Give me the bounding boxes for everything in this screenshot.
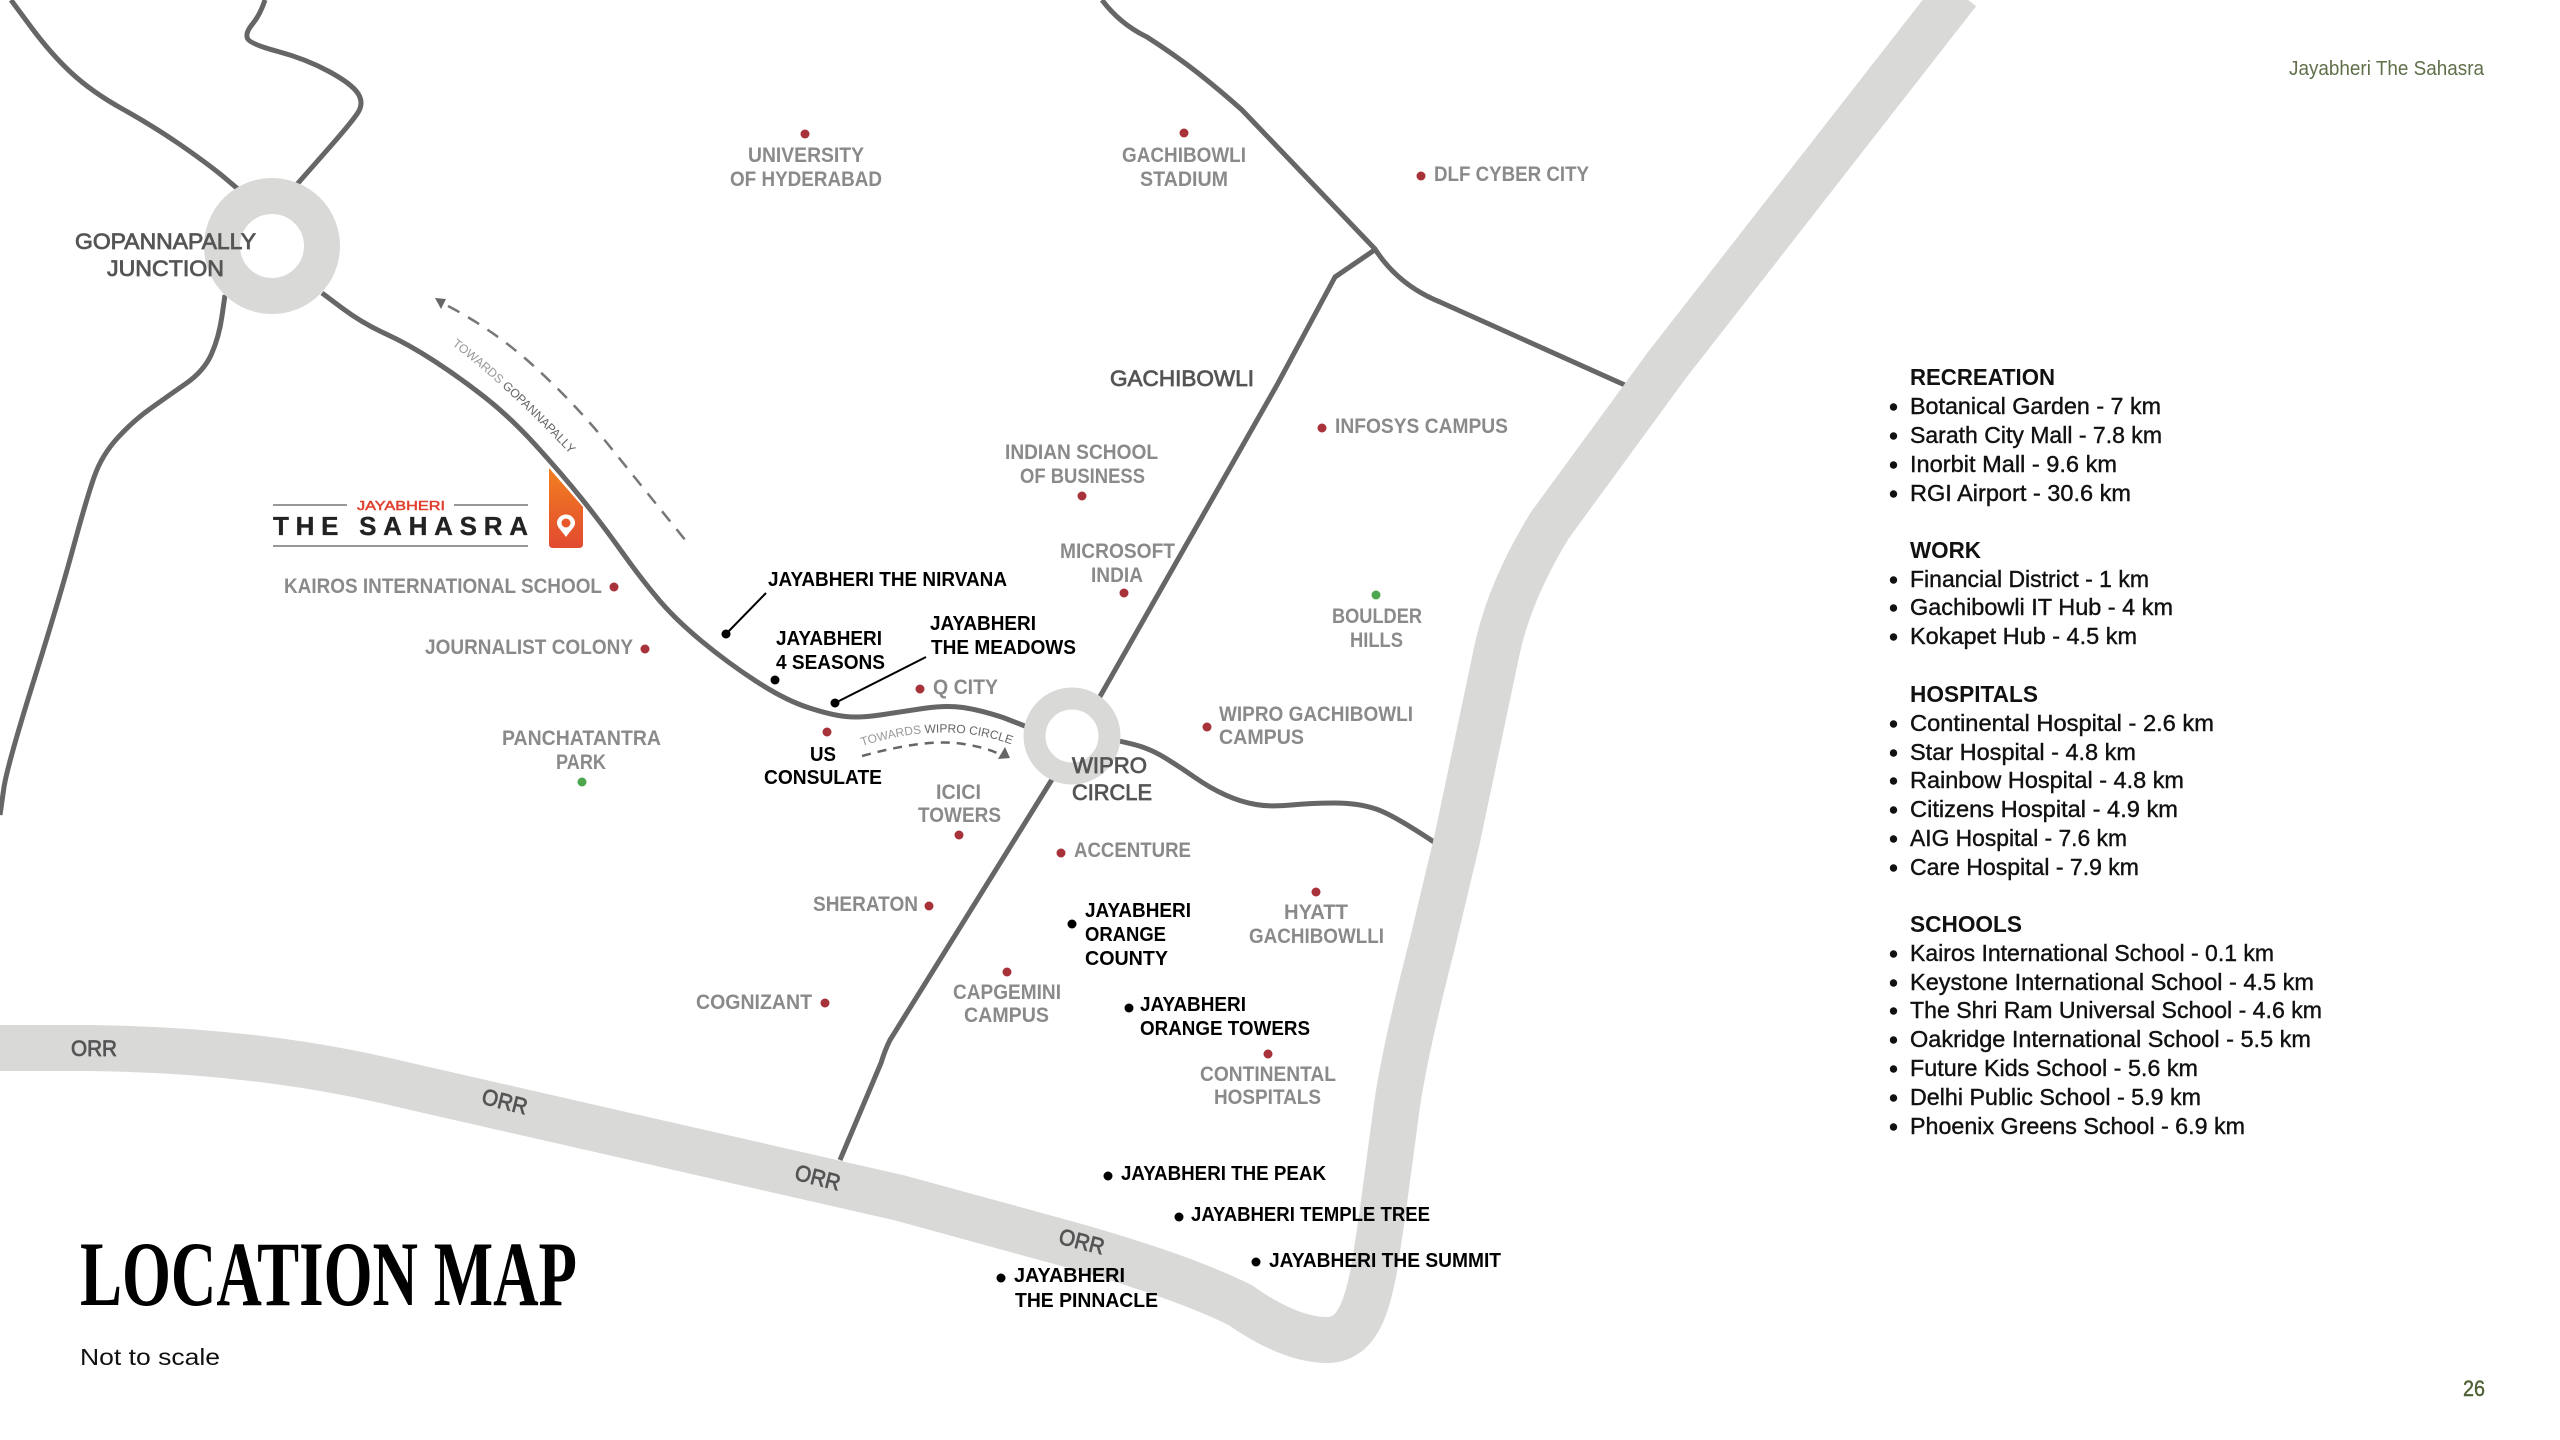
project: Jayabheri Orange County: COUNTY (1085, 947, 1168, 970)
place: ICICI Towers: TOWERS (918, 804, 1001, 827)
project: Jayabheri The Meadows (830, 612, 1076, 708)
list: recreation: Botanical Garden - 7 km (1910, 393, 2161, 419)
project: Jayabheri The Pinnacle: JAYABHERI (1014, 1264, 1125, 1287)
place: Capgemini Campus (953, 968, 1061, 1027)
list: schools (1890, 911, 2322, 1139)
project: Jayabheri Orange Towers: ORANGE TOWERS (1140, 1017, 1310, 1040)
place: Cognizant: COGNIZANT (696, 991, 812, 1014)
place: Panchatantra Park: PARK (556, 751, 606, 774)
place: Gachibowli Stadium (1122, 128, 1246, 191)
label: Wipro Circle: WIPRO (1072, 753, 1147, 778)
list: recreation: RECREATION (1910, 364, 2055, 390)
page number: 26 (2463, 1376, 2485, 1401)
list: hospitals: AIG Hospital - 7.6 km (1910, 825, 2127, 851)
project: Jayabheri Orange County: ORANGE (1085, 923, 1166, 946)
project: Jayabheri The Nirvana: JAYABHERI THE NIRVANA (768, 568, 1007, 591)
list: schools: Kairos International School - 0.1 km (1910, 940, 2274, 966)
road label: ORR 2: ORR (479, 1084, 530, 1119)
project: Jayabheri Orange County (1068, 899, 1191, 970)
place: Capgemini Campus: CAMPUS (964, 1004, 1049, 1027)
list: schools: The Shri Ram Universal School - 4.6 km (1910, 997, 2322, 1023)
road: Wipro Circle to ORR east (1115, 740, 1440, 846)
list: recreation: Sarath City Mall - 7.8 km (1910, 422, 2162, 448)
place: Q City: Q CITY (933, 676, 998, 699)
header: project name: Jayabheri The Sahasra (2289, 57, 2485, 80)
list: schools: SCHOOLS (1910, 911, 2022, 937)
project: Jayabheri Orange Towers: JAYABHERI (1140, 993, 1246, 1016)
project: Jayabheri The Nirvana (722, 568, 1007, 638)
place: ICICI Towers (918, 781, 1001, 840)
road: top junction to ORR (1102, 0, 1627, 386)
place: Hyatt Gachibowlli: HYATT (1284, 901, 1348, 924)
place: Indian School of Business: INDIAN SCHOOL (1005, 441, 1158, 464)
project: Jayabheri The Summit: JAYABHERI THE SUMMIT (1269, 1249, 1501, 1272)
list: schools: Delhi Public School - 5.9 km (1910, 1084, 2201, 1110)
place: Sheraton: SHERATON (813, 893, 918, 916)
project: Jayabheri Orange County: JAYABHERI (1085, 899, 1191, 922)
place: Gachibowli Stadium: STADIUM (1140, 168, 1228, 191)
project: Jayabheri The Meadows: JAYABHERI (930, 612, 1036, 635)
place: University of Hyderabad (730, 130, 882, 191)
list: work: WORK (1910, 537, 1981, 563)
list: work: Kokapet Hub - 4.5 km (1910, 623, 2137, 649)
label: Wipro Circle (1072, 753, 1152, 805)
logo: Jayabheri The Sahasra: THE SAHASRA (273, 511, 528, 541)
label: Gachibowli: GACHIBOWLI (1110, 366, 1254, 391)
project: Jayabheri 4 Seasons: 4 SEASONS (776, 651, 885, 674)
place: Boulder Hills (1332, 590, 1422, 652)
list: hospitals: HOSPITALS (1910, 681, 2038, 707)
list: recreation: Inorbit Mall - 9.6 km (1910, 451, 2117, 477)
project: Jayabheri The Peak: JAYABHERI THE PEAK (1121, 1162, 1326, 1185)
list: hospitals: Rainbow Hospital - 4.8 km (1910, 767, 2184, 793)
place: Kairos International School: KAIROS INTERNATIONAL SCHOOL (284, 575, 602, 598)
place: US Consulate (764, 728, 882, 789)
list: schools: Phoenix Greens School - 6.9 km (1910, 1113, 2245, 1139)
project: Jayabheri The Pinnacle (996, 1264, 1158, 1312)
logo: Jayabheri The Sahasra (273, 498, 528, 546)
road: north-west arm to Gopannapally (11, 0, 245, 195)
road: Gopannapally to Wipro Circle (322, 293, 1030, 728)
place: Continental Hospitals (1200, 1050, 1336, 1109)
project: Jayabheri The Pinnacle: THE PINNACLE (1015, 1289, 1158, 1312)
project: Jayabheri 4 Seasons (770, 627, 885, 684)
map: road network (0, 0, 1958, 1340)
project: Jayabheri Temple Tree: JAYABHERI TEMPLE TREE (1191, 1203, 1430, 1226)
list: schools: Keystone International School - 4.5 km (1910, 969, 2314, 995)
arrow: towards Wipro Circle (860, 724, 1014, 759)
place: Panchatantra Park: PANCHATANTRA (502, 727, 661, 750)
place: Continental Hospitals: HOSPITALS (1214, 1086, 1321, 1109)
project: Jayabheri 4 Seasons: JAYABHERI (776, 627, 882, 650)
project: Jayabheri The Meadows: THE MEADOWS (931, 636, 1076, 659)
place: Gachibowli Stadium: GACHIBOWLI (1122, 144, 1246, 167)
place: University of Hyderabad: OF HYDERABAD (730, 168, 882, 191)
place: Microsoft India: INDIA (1091, 564, 1143, 587)
road label: ORR 3: ORR (792, 1160, 843, 1195)
label: Wipro Circle: CIRCLE (1072, 780, 1152, 805)
place: US Consulate: US (810, 743, 836, 766)
roundabout: Gopannapally (222, 196, 322, 296)
label: Gopannapally Junction (75, 229, 256, 281)
title: LOCATION MAP (80, 1223, 577, 1325)
place: Microsoft India: MICROSOFT (1060, 540, 1175, 563)
place: Indian School of Business: OF BUSINESS (1020, 465, 1145, 488)
road: Wipro Circle to ORR south (840, 773, 1056, 1160)
place: US Consulate: CONSULATE (764, 766, 882, 789)
place: Wipro Gachibowli Campus: CAMPUS (1219, 726, 1304, 749)
label: Gopannapally Junction: GOPANNAPALLY (75, 229, 256, 254)
list: hospitals: Star Hospital - 4.8 km (1910, 739, 2136, 765)
road: south-west arm (0, 295, 225, 815)
place: Accenture: ACCENTURE (1074, 839, 1191, 862)
place: Boulder Hills: HILLS (1350, 629, 1403, 652)
list: work: Gachibowli IT Hub - 4 km (1910, 594, 2173, 620)
road label: ORR west: ORR (71, 1036, 117, 1061)
place: University of Hyderabad: UNIVERSITY (748, 144, 864, 167)
list: hospitals: Continental Hospital - 2.6 km (1910, 710, 2214, 736)
place: Capgemini Campus: CAPGEMINI (953, 981, 1061, 1004)
place: Infosys Campus: INFOSYS CAMPUS (1335, 415, 1508, 438)
place: Continental Hospitals: CONTINENTAL (1200, 1063, 1336, 1086)
place: Microsoft India (1060, 540, 1175, 598)
label: Gopannapally Junction: JUNCTION (107, 256, 224, 281)
place: Indian School of Business (1005, 441, 1158, 500)
place: Hyatt Gachibowlli (1249, 888, 1384, 948)
place: Hyatt Gachibowlli: GACHIBOWLLI (1249, 925, 1384, 948)
panel: distance lists (1890, 364, 2322, 1139)
road: north arm to Gopannapally (247, 0, 361, 190)
note: not to scale: Not to scale (80, 1344, 220, 1370)
place: DLF Cyber City: DLF CYBER CITY (1434, 163, 1589, 186)
list: work (1890, 537, 2173, 649)
place: Boulder Hills: BOULDER (1332, 605, 1422, 628)
roundabout: Wipro Circle (1034, 698, 1110, 774)
place: Panchatantra Park (502, 727, 661, 786)
list: schools: Oakridge International School - 5.5 km (1910, 1026, 2311, 1052)
list: work: Financial District - 1 km (1910, 566, 2149, 592)
list: hospitals (1890, 681, 2214, 880)
arrow: towards Wipro Circle: TOWARDS WIPRO CIRCLE (860, 724, 1014, 745)
road: Wipro Circle north to Gachibowli (1098, 249, 1376, 700)
list: hospitals: Care Hospital - 7.9 km (1910, 854, 2139, 880)
logo: Jayabheri The Sahasra: JAYABHERI (357, 498, 445, 513)
road: Outer Ring Road (0, 0, 1958, 1340)
place: Journalist Colony: JOURNALIST COLONY (425, 636, 633, 659)
place: ICICI Towers: ICICI (936, 781, 981, 804)
list: recreation: RGI Airport - 30.6 km (1910, 480, 2131, 506)
pin: The Sahasra marker (549, 468, 583, 548)
arrow: towards Gopannapally (435, 298, 686, 540)
list: hospitals: Citizens Hospital - 4.9 km (1910, 796, 2178, 822)
project: Jayabheri Orange Towers (1124, 993, 1310, 1040)
place: Wipro Gachibowli Campus (1202, 703, 1413, 749)
road label: ORR 4: ORR (1056, 1224, 1107, 1259)
arrow: towards Gopannapally: TOWARDS GOPANNAPALLY (454, 338, 576, 452)
list: recreation (1890, 364, 2162, 506)
place: Wipro Gachibowli Campus: WIPRO GACHIBOWLI (1219, 703, 1413, 726)
list: schools: Future Kids School - 5.6 km (1910, 1055, 2198, 1081)
